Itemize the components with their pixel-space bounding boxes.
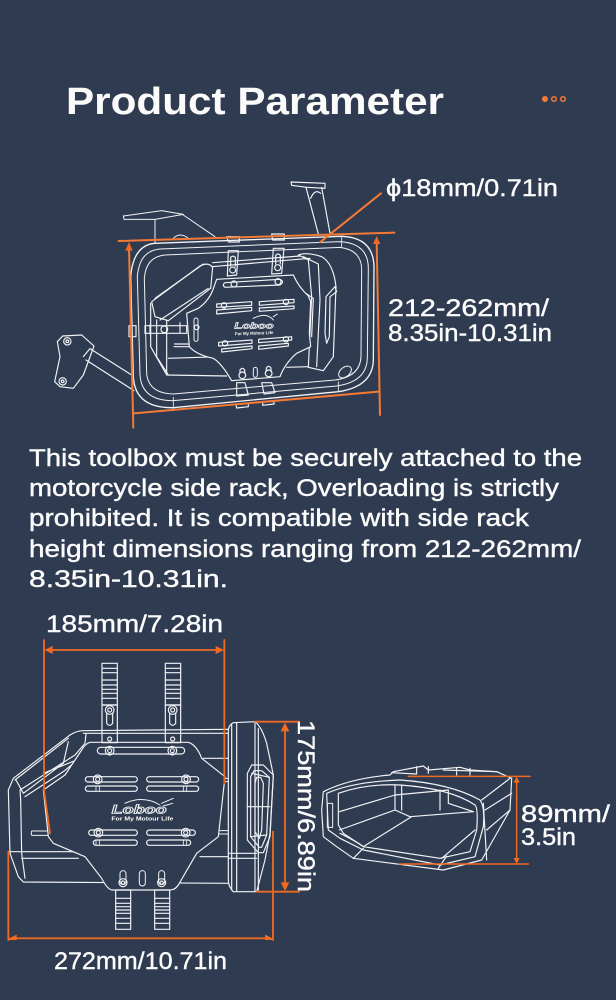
label: rack height xyxy=(388,295,552,347)
logo on plate: For My Motour Life xyxy=(235,330,274,336)
label: depth: 89mm/ xyxy=(521,801,610,828)
mounting plate xyxy=(187,275,311,381)
label: height, vertical: 175mm/6.89in xyxy=(292,720,319,892)
label: depth xyxy=(521,801,610,851)
upper mount bracket left xyxy=(123,211,215,243)
upper mount bracket right xyxy=(291,182,330,234)
toolbox body xyxy=(151,254,337,376)
logo on plate: Loboo xyxy=(112,802,167,816)
lower straps xyxy=(116,890,170,929)
toolbox mounted on side rack line drawing xyxy=(55,182,394,428)
compatibility paragraph: prohibited. It is compatible with side rack xyxy=(29,505,530,532)
compatibility paragraph: motorcycle side rack, Overloading is strictly xyxy=(29,475,559,502)
toolbox front view line drawing xyxy=(8,640,299,940)
upper straps xyxy=(102,663,181,743)
logo on plate xyxy=(234,314,277,336)
title: Product Parameter xyxy=(66,81,444,123)
strap clamps xyxy=(129,234,284,408)
logo on plate xyxy=(111,798,173,823)
label: length: 272mm/10.71in xyxy=(54,948,227,975)
compatibility paragraph: This toolbox must be securely attached to the xyxy=(29,445,582,472)
end cap xyxy=(228,722,273,892)
dimension lines xyxy=(8,640,299,940)
logo on plate: For My Motour Life xyxy=(111,817,173,823)
mounting plate xyxy=(43,742,225,890)
compatibility paragraph: 8.35in-10.31in. xyxy=(29,566,228,593)
rack frame xyxy=(131,236,374,408)
icon: three decorative dots xyxy=(542,96,565,102)
dimension lines xyxy=(119,193,394,428)
toolbox body outline xyxy=(8,729,232,883)
arrowheads xyxy=(125,236,380,251)
arrowheads xyxy=(514,777,520,864)
arrowheads xyxy=(9,646,289,940)
toolbox side view line drawing xyxy=(322,766,530,870)
label: depth: 3.5in xyxy=(521,824,576,851)
label: width: 185mm/7.28in xyxy=(46,611,223,638)
label: rack height: 212-262mm/ xyxy=(388,295,549,322)
dimension lines xyxy=(399,776,530,864)
label: tube diameter: ϕ18mm/0.71in xyxy=(386,175,558,202)
compatibility paragraph xyxy=(29,445,582,593)
logo on plate: Loboo xyxy=(234,320,275,330)
compatibility paragraph: height dimensions ranging from 212-262mm/ xyxy=(29,536,581,563)
label: rack height: 8.35in-10.31in xyxy=(388,320,552,347)
lower mount arm xyxy=(55,335,134,391)
